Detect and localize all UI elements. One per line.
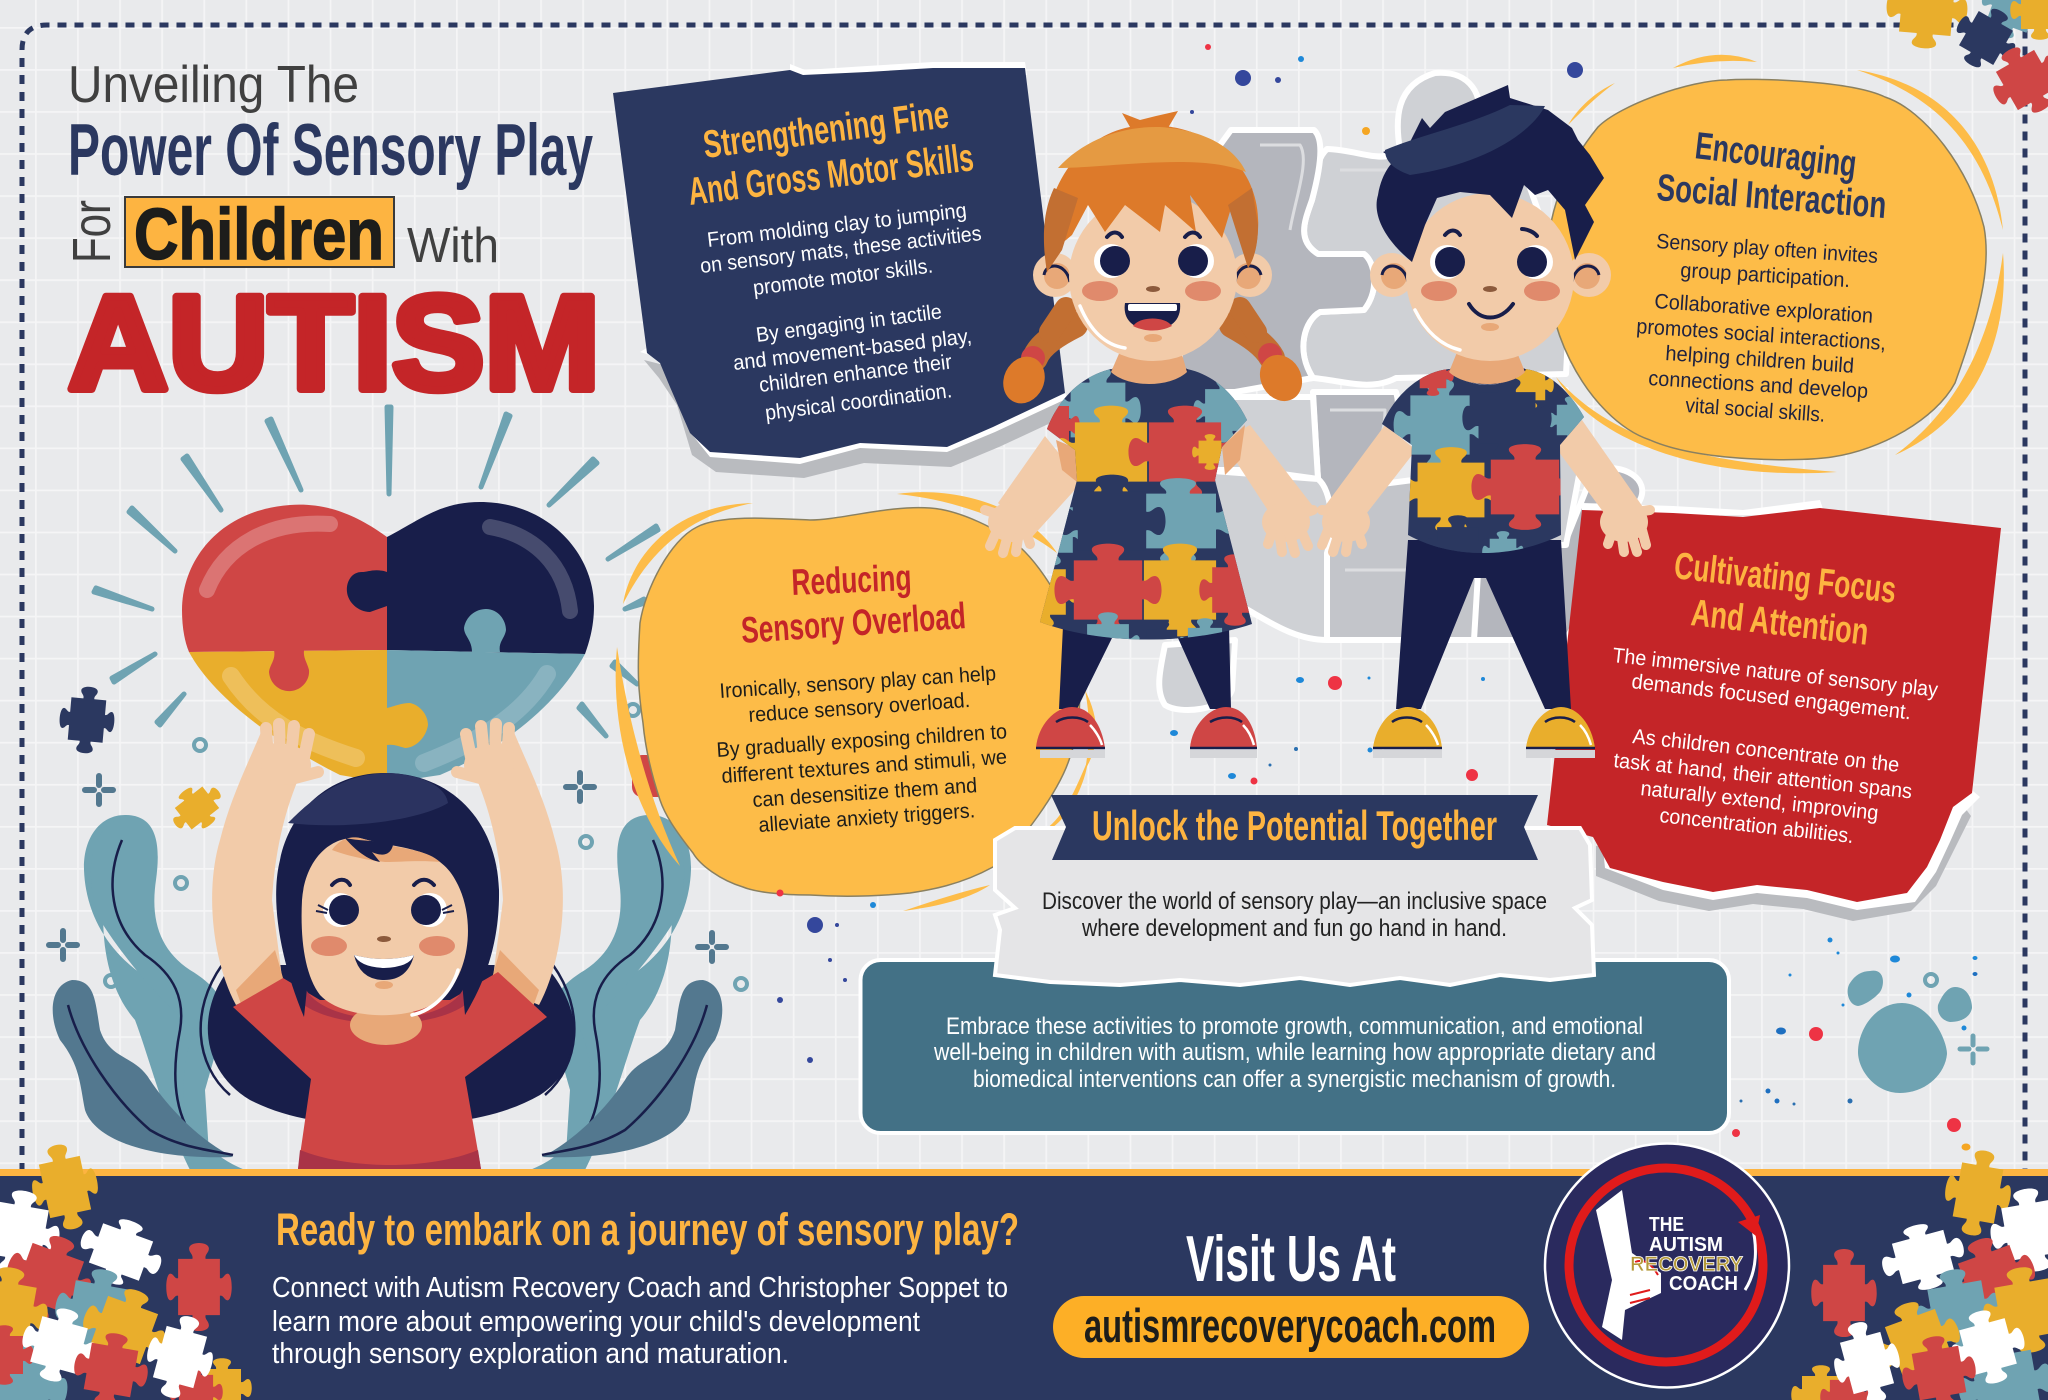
panel: reducing sensory overload	[616, 492, 1096, 911]
title: For	[62, 200, 122, 263]
panel: encouraging social interaction	[1547, 55, 2004, 473]
body text: reduce sensory overload.	[748, 689, 971, 727]
footer call to action	[272, 1204, 1019, 1370]
logo: autism recovery coach: RECOVERY	[1630, 1253, 1743, 1276]
swooshes	[616, 492, 1096, 911]
logo: autism recovery coach: AUTISM	[1649, 1234, 1723, 1256]
visit us: Visit Us At	[1186, 1222, 1396, 1295]
body text: task at hand, their attention spans	[1612, 749, 1913, 803]
leaves left	[53, 815, 245, 1170]
body text: can desensitize them and	[752, 774, 978, 812]
body text: Sensory play often invites	[1656, 230, 1879, 268]
title: Power Of Sensory Play	[68, 110, 593, 191]
torn grey note: where development and fun go hand in hand.	[1081, 915, 1507, 942]
body text: children enhance their	[758, 350, 953, 397]
footer call to action: Ready to embark on a journey of sensory play?	[276, 1204, 1019, 1255]
teal blobs and cross	[1848, 971, 1987, 1093]
illustration: girl holding heart	[201, 724, 574, 1169]
body text: vital social skills.	[1685, 394, 1826, 427]
torn grey note	[995, 828, 1594, 985]
illustration: boy with navy hair	[1322, 85, 1650, 758]
panel: unlock the potential	[860, 795, 1729, 1133]
ribbon heading: Unlock the Potential Together	[1092, 802, 1497, 849]
footer band	[0, 1169, 2048, 1400]
visit us	[1053, 1222, 1529, 1358]
visit us: autismrecoverycoach.com	[1084, 1299, 1496, 1352]
body text: promotes social interactions,	[1636, 315, 1887, 355]
body text	[699, 199, 983, 425]
heading: Social Interaction	[1655, 167, 1888, 227]
decorative rings and crosses	[49, 704, 747, 990]
icon: gold puzzle piece	[162, 774, 232, 842]
body text: concentration abilities.	[1658, 804, 1855, 848]
body text: physical coordination.	[764, 379, 953, 425]
body text: and movement-based play,	[732, 325, 973, 375]
footer call to action: Connect with Autism Recovery Coach and Christopher Soppet to	[272, 1272, 1008, 1304]
swooshes	[1556, 55, 2004, 473]
heading	[1672, 545, 1898, 654]
rays around heart	[94, 407, 658, 736]
body text: connections and develop	[1648, 367, 1869, 403]
torn grey note: Discover the world of sensory play—an inclusive space	[1042, 888, 1547, 915]
body text: From molding clay to jumping	[706, 199, 968, 252]
body text	[716, 662, 1008, 837]
heading: Sensory Overload	[740, 595, 967, 651]
footer call to action: learn more about empowering your child's development	[272, 1306, 920, 1338]
logo: autism recovery coach: THE	[1649, 1214, 1684, 1236]
body text: promote motor skills.	[752, 254, 934, 300]
body text: By engaging in tactile	[755, 300, 943, 347]
heading: Encouraging	[1693, 125, 1859, 186]
ribbon heading	[1051, 795, 1538, 860]
torn paper edge	[644, 360, 1072, 478]
body text: different textures and stimuli, we	[721, 746, 1008, 788]
heading: Strengthening Fine	[701, 93, 951, 167]
puzzle cluster bottom right	[1791, 1145, 2048, 1400]
body text	[1611, 644, 1940, 848]
body text: alleviate anxiety triggers.	[758, 799, 976, 837]
body text: Collaborative exploration	[1654, 290, 1874, 328]
body text: As children concentrate on the	[1631, 725, 1900, 777]
body text: on sensory mats, these activities	[699, 222, 983, 278]
title	[62, 56, 600, 418]
icon: navy puzzle piece	[57, 684, 117, 756]
heading: And Gross Motor Skills	[686, 136, 976, 214]
body text: The immersive nature of sensory play	[1611, 644, 1940, 702]
footer call to action: through sensory exploration and maturation.	[272, 1338, 789, 1370]
body text: By gradually exposing children to	[716, 720, 1008, 762]
teal panel: biomedical interventions can offer a synergistic mechanism of growth.	[973, 1066, 1616, 1093]
body text: group participation.	[1680, 259, 1851, 292]
body text: demands focused engagement.	[1630, 670, 1912, 724]
title: AUTISM	[68, 269, 600, 418]
heading: Cultivating Focus	[1672, 545, 1898, 612]
leaves right	[530, 815, 722, 1170]
teal panel	[860, 960, 1729, 1133]
small red shape behind blob	[632, 755, 672, 797]
title: With	[407, 219, 499, 273]
body text: Ironically, sensory play can help	[719, 662, 997, 703]
body text: helping children build	[1665, 342, 1855, 378]
logo: autism recovery coach	[1545, 1144, 1789, 1388]
heading	[740, 557, 967, 651]
heading	[1655, 125, 1888, 227]
title: Children	[134, 195, 384, 275]
puzzle cluster bottom left	[0, 1138, 252, 1400]
torn paper edge	[1596, 796, 1971, 921]
body text: naturally extend, improving	[1639, 777, 1880, 825]
heading: And Attention	[1689, 592, 1871, 654]
paint splatter dots	[776, 44, 1978, 1150]
body text	[1636, 230, 1887, 427]
top-right puzzle pieces	[1883, 0, 2048, 127]
teal panel: well-being in children with autism, while learning how appropriate dietary and	[933, 1039, 1656, 1066]
heading	[686, 93, 976, 214]
teal panel: Embrace these activities to promote growth, communication, and emotional	[946, 1013, 1643, 1040]
background grey jigsaw	[1159, 73, 1642, 710]
illustration: girl with orange hair	[985, 111, 1313, 758]
panel: cultivating focus	[1547, 500, 2001, 921]
logo: autism recovery coach: COACH	[1669, 1273, 1738, 1295]
heading: Reducing	[791, 557, 912, 603]
panel: strengthening motor skills	[613, 62, 1072, 478]
title: Unveiling The	[68, 56, 359, 114]
icon: jigsaw heart	[182, 502, 594, 783]
